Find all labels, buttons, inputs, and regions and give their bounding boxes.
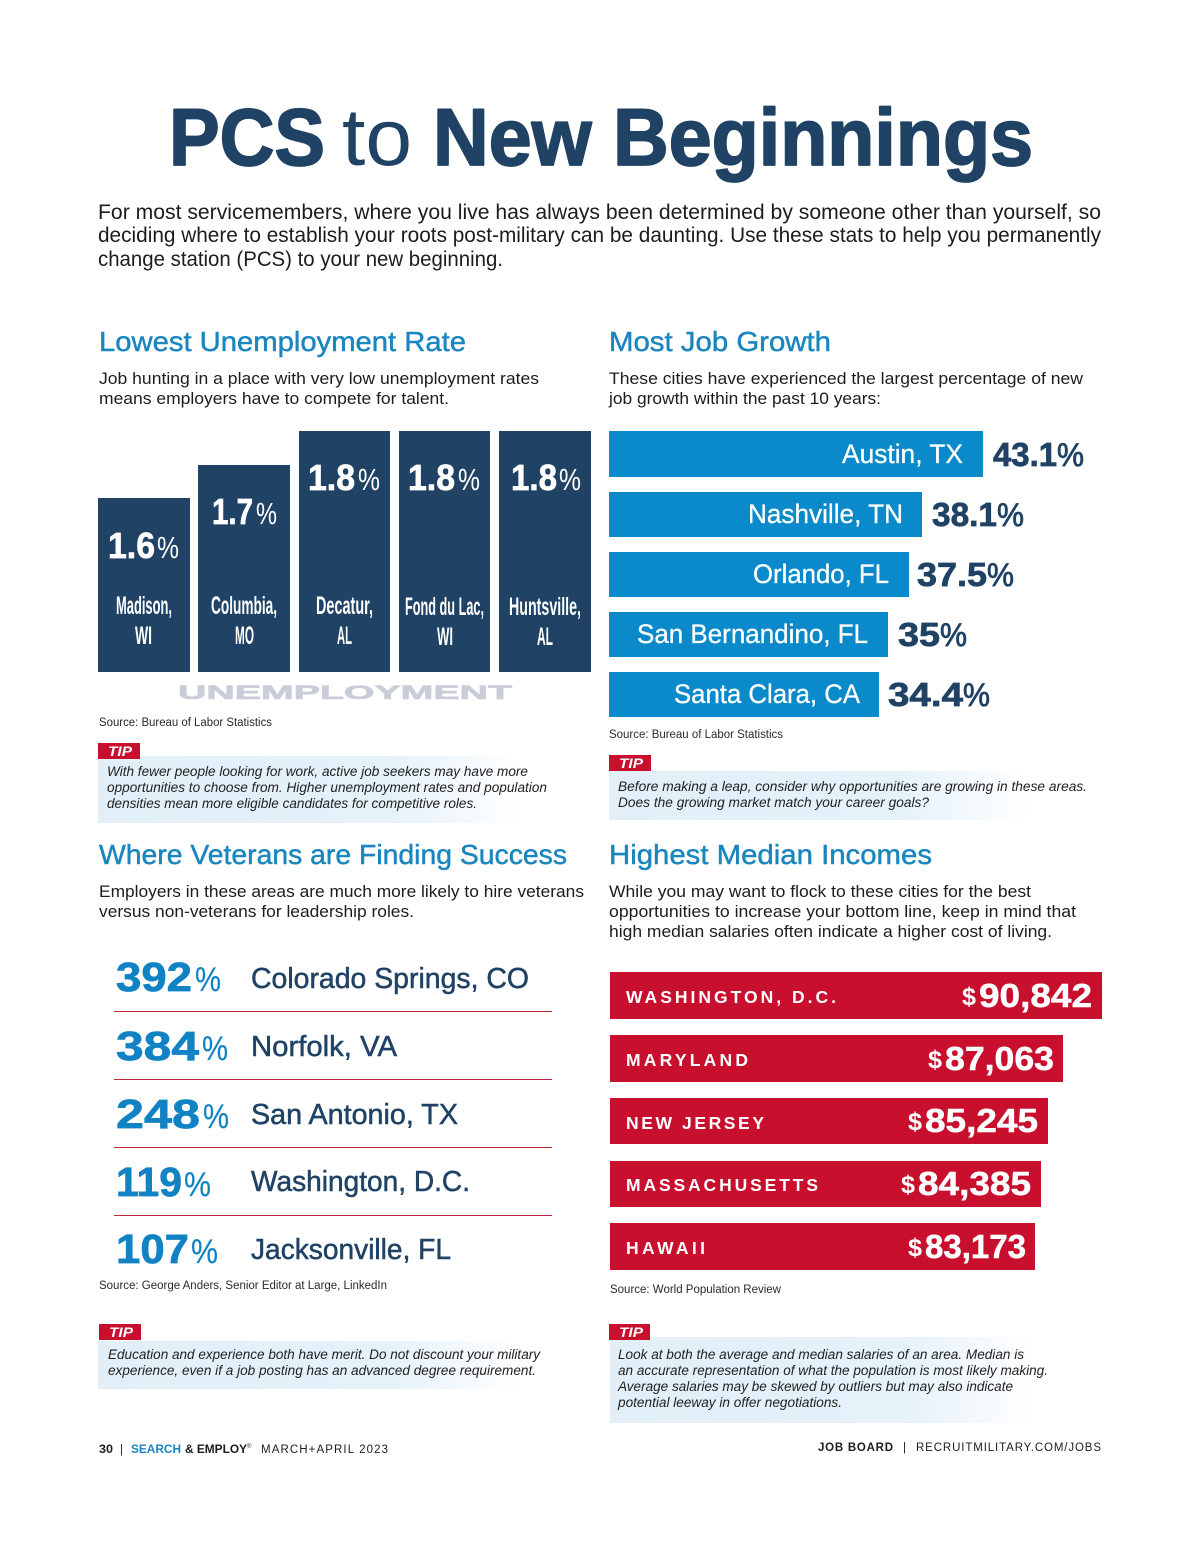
bar: Madison, WI 1.6%: % <box>157 530 179 565</box>
description: median incomes <box>609 882 1076 941</box>
title: to <box>342 93 412 183</box>
bar: Decatur, AL 1.8%: AL <box>337 622 352 650</box>
bar: Massachusetts $84,385: MASSACHUSETTS <box>626 1175 818 1195</box>
bar: Huntsville, AL 1.8%: 1.8 <box>511 457 557 498</box>
ranked list: veteran hiring by city <box>114 954 552 1272</box>
bar: Austin, TX 43.1%: 43.1 <box>993 436 1057 473</box>
tip: unemployment: densities mean more eligible candidates for competitive roles. <box>107 796 477 811</box>
bar: Columbia, MO 1.7%: MO <box>235 622 254 650</box>
description: median incomes: high median salaries often indicate a higher cost of living. <box>609 922 1052 941</box>
bar: Washington, D.C. $90,842: WASHINGTON, D.C. <box>626 987 836 1007</box>
bar: Fond du Lac, WI 1.8%: WI <box>437 623 453 651</box>
row: San Antonio, TX 248%: 248 <box>116 1091 200 1137</box>
description: veterans: Employers in these areas are much more likely to hire veterans <box>99 882 584 901</box>
bar: Huntsville, AL 1.8%: AL <box>537 623 553 651</box>
bar: Maryland $87,063 <box>610 1035 1063 1082</box>
tip: median incomes: Look at both the average and median salaries of an area. Median is <box>618 1347 1024 1362</box>
tip: veterans: experience, even if a job posting has an advanced degree requirement. <box>108 1363 536 1378</box>
bar: Orlando, FL 37.5%: Orlando, FL <box>753 559 889 589</box>
bar: Fond du Lac, WI 1.8%: 1.8 <box>408 457 455 498</box>
bar: Nashville, TN 38.1% <box>609 492 1024 537</box>
bar: Columbia, MO 1.7%: % <box>256 496 277 531</box>
tip: unemployment: TIP <box>108 743 133 759</box>
tip: median incomes: TIP <box>619 1324 644 1340</box>
row: San Antonio, TX 248% <box>116 1091 458 1137</box>
bar: Massachusetts $84,385: 84,385 <box>918 1165 1031 1202</box>
bar: Maryland $87,063: $ <box>928 1046 942 1074</box>
bar: Massachusetts $84,385 <box>610 1161 1041 1207</box>
bar: Hawaii $83,173 <box>610 1223 1035 1270</box>
bar: Orlando, FL 37.5% <box>609 552 1014 597</box>
bar: Orlando, FL 37.5%: % <box>987 557 1014 593</box>
bar: Fond du Lac, WI 1.8%: Fond du Lac, <box>405 593 484 621</box>
footer left: | <box>120 1444 123 1456</box>
bar: Maryland $87,063: MARYLAND <box>626 1050 748 1070</box>
title: PCS <box>169 93 325 183</box>
bar: Columbia, MO 1.7%: Columbia, <box>211 592 277 620</box>
panel: most job growth <box>608 326 1087 820</box>
row: San Antonio, TX 248%: San Antonio, TX <box>251 1099 458 1131</box>
description: veterans: versus non-veterans for leadership roles. <box>99 902 414 921</box>
tip: job growth: Does the growing market match your career goals? <box>618 795 929 810</box>
description: unemployment: Job hunting in a place with very low unemployment rates <box>99 369 539 388</box>
bar: Nashville, TN 38.1%: 38.1 <box>932 496 997 533</box>
bar: Washington, D.C. $90,842: $ <box>962 983 976 1011</box>
row: Washington, D.C. 119%: Washington, D.C. <box>251 1166 470 1198</box>
bar: Decatur, AL 1.8%: % <box>358 462 380 497</box>
bar chart: unemployment by city <box>98 431 591 704</box>
description: job growth <box>608 369 1084 408</box>
row: San Antonio, TX 248%: % <box>203 1098 229 1136</box>
row: Washington, D.C. 119%: 119 <box>116 1159 182 1205</box>
footer right <box>818 1442 1101 1454</box>
panel: where veterans are finding success <box>98 839 584 1389</box>
bar: Hawaii $83,173: HAWAII <box>626 1238 705 1258</box>
bar: Orlando, FL 37.5%: 37.5 <box>917 556 987 593</box>
bar: Columbia, MO 1.7% <box>198 465 290 672</box>
axis label: unemployment: UNEMPLOYMENT <box>178 682 512 704</box>
bar: Fond du Lac, WI 1.8% <box>399 431 490 672</box>
heading: most job growth: Most Job Growth <box>609 326 831 357</box>
bar: Austin, TX 43.1%: % <box>1057 437 1084 473</box>
description: job growth: These cities have experienced the largest percentage of new <box>609 369 1084 388</box>
panel: highest median incomes <box>609 839 1102 1423</box>
tip: job growth: TIP <box>619 755 644 771</box>
heading: lowest unemployment rate: Lowest Unemployment Rate <box>99 326 466 357</box>
row: Washington, D.C. 119%: % <box>184 1166 211 1204</box>
heading: veterans: Where Veterans are Finding Success <box>99 839 567 870</box>
bar: Decatur, AL 1.8%: 1.8 <box>308 457 355 498</box>
bar: San Bernandino, FL 35%: San Bernandino, FL <box>637 619 868 649</box>
bar: Santa Clara, CA 34.4% <box>609 672 990 717</box>
bar: Columbia, MO 1.7%: 1.7 <box>212 491 253 532</box>
footer left: MARCH+APRIL 2023 <box>261 1444 388 1456</box>
row: Norfolk, VA 384% <box>116 1023 397 1069</box>
source: unemployment: Source: Bureau of Labor Statistics <box>99 717 272 729</box>
tip: unemployment: With fewer people looking for work, active job seekers may have more <box>107 764 528 779</box>
bar: Nashville, TN 38.1%: % <box>997 497 1024 533</box>
description: median incomes: opportunities to increase your bottom line, keep in mind that <box>609 902 1076 921</box>
description: job growth: job growth within the past 10 years: <box>608 389 881 408</box>
row: Norfolk, VA 384%: Norfolk, VA <box>251 1031 397 1063</box>
bar: Santa Clara, CA 34.4%: Santa Clara, CA <box>674 679 860 709</box>
tip: unemployment: opportunities to choose from. Higher unemployment rates and population <box>107 780 547 795</box>
bar: Decatur, AL 1.8% <box>299 431 390 672</box>
bar: New Jersey $85,245: 85,245 <box>925 1102 1038 1139</box>
intro text: change station (PCS) to your new beginning. <box>98 247 503 271</box>
bar: Madison, WI 1.6% <box>98 498 190 672</box>
title: New Beginnings <box>433 93 1033 183</box>
row: Jacksonville, FL 107%: Jacksonville, FL <box>251 1234 451 1266</box>
bar: New Jersey $85,245 <box>610 1098 1048 1144</box>
bar: New Jersey $85,245: $ <box>908 1108 922 1136</box>
bar: Madison, WI 1.6%: WI <box>135 622 152 650</box>
footer left: SEARCH <box>131 1444 181 1456</box>
description: veterans <box>99 882 584 921</box>
intro text <box>98 200 1101 271</box>
heading: median incomes: Highest Median Incomes <box>609 839 932 870</box>
bar: Fond du Lac, WI 1.8%: % <box>458 462 480 497</box>
bar: San Bernandino, FL 35%: % <box>940 617 967 653</box>
bar: Santa Clara, CA 34.4%: % <box>963 677 990 713</box>
bar chart: median income by area <box>610 972 1102 1270</box>
tip: median incomes: Average salaries may be skewed by outliers but may also indicate <box>617 1379 1013 1394</box>
description: unemployment: means employers have to compete for talent. <box>99 389 449 408</box>
source: job growth: Source: Bureau of Labor Statistics <box>609 729 783 741</box>
footer left: ® <box>247 1443 252 1450</box>
bar: Hawaii $83,173: $ <box>908 1234 922 1262</box>
bar: Austin, TX 43.1%: Austin, TX <box>842 439 963 469</box>
description: median incomes: While you may want to flock to these cities for the best <box>609 882 1031 901</box>
footer right: RECRUITMILITARY.COM/JOBS <box>916 1442 1101 1454</box>
intro text: For most servicemembers, where you live has always been determined by someone other than yourself, so <box>98 200 1101 224</box>
tip: median incomes: potential leeway in offer negotiations. <box>617 1395 842 1410</box>
bar: Santa Clara, CA 34.4%: 34.4 <box>888 676 964 713</box>
row: Colorado Springs, CO 392% <box>116 954 529 1000</box>
footer left: & EMPLOY <box>185 1444 247 1456</box>
bar: Decatur, AL 1.8%: Decatur, <box>316 592 373 620</box>
footer left: 30 <box>99 1444 113 1456</box>
bar: Huntsville, AL 1.8% <box>499 431 591 672</box>
tip: veterans: Education and experience both have merit. Do not discount your military <box>108 1347 541 1362</box>
bar: Madison, WI 1.6%: 1.6 <box>108 525 155 566</box>
bar: New Jersey $85,245: NEW JERSEY <box>626 1113 764 1133</box>
tip: job growth <box>609 755 1087 820</box>
bar: San Bernandino, FL 35%: 35 <box>898 616 940 653</box>
bar: Hawaii $83,173: 83,173 <box>925 1228 1026 1265</box>
footer right: JOB BOARD <box>818 1442 893 1454</box>
row: Colorado Springs, CO 392%: Colorado Springs, CO <box>251 963 529 995</box>
bar: Austin, TX 43.1% <box>609 431 1084 477</box>
row: Jacksonville, FL 107%: 107 <box>116 1226 189 1272</box>
bar: Nashville, TN 38.1%: Nashville, TN <box>748 499 903 529</box>
bar chart: job growth by city <box>609 431 1084 717</box>
panel: lowest unemployment rate <box>98 326 591 823</box>
bar: Huntsville, AL 1.8%: Huntsville, <box>509 593 581 621</box>
row: Washington, D.C. 119% <box>116 1159 470 1205</box>
bar: San Bernandino, FL 35% <box>609 612 967 657</box>
footer right: | <box>903 1442 906 1454</box>
tip: veterans <box>98 1324 541 1389</box>
bar: Madison, WI 1.6%: Madison, <box>116 592 172 620</box>
tip: median incomes <box>609 1324 1048 1423</box>
footer left <box>99 1443 388 1456</box>
intro text: deciding where to establish your roots post-military can be daunting. Use these stats to help you permanently <box>98 223 1101 247</box>
title <box>169 93 1033 183</box>
row: Norfolk, VA 384%: % <box>202 1030 228 1068</box>
row: Colorado Springs, CO 392%: % <box>195 961 221 999</box>
bar: Washington, D.C. $90,842: 90,842 <box>979 977 1092 1014</box>
tip: veterans: TIP <box>109 1324 134 1340</box>
row: Jacksonville, FL 107%: % <box>191 1233 218 1271</box>
source: median incomes: Source: World Population Review <box>610 1284 782 1296</box>
row: Norfolk, VA 384%: 384 <box>116 1023 199 1069</box>
tip: median incomes: an accurate representation of what the population is most likely making. <box>618 1363 1048 1378</box>
row: Colorado Springs, CO 392%: 392 <box>116 954 192 1000</box>
row: Jacksonville, FL 107% <box>116 1226 451 1272</box>
bar: Washington, D.C. $90,842 <box>610 972 1102 1019</box>
description: unemployment <box>99 369 539 408</box>
bar: Massachusetts $84,385: $ <box>901 1171 915 1199</box>
bar: Huntsville, AL 1.8%: % <box>559 462 581 497</box>
bar: Maryland $87,063: 87,063 <box>945 1040 1054 1077</box>
source: veterans: Source: George Anders, Senior Editor at Large, LinkedIn <box>99 1280 387 1292</box>
tip: unemployment <box>98 743 547 823</box>
tip: job growth: Before making a leap, consider why opportunities are growing in these areas. <box>618 779 1087 794</box>
